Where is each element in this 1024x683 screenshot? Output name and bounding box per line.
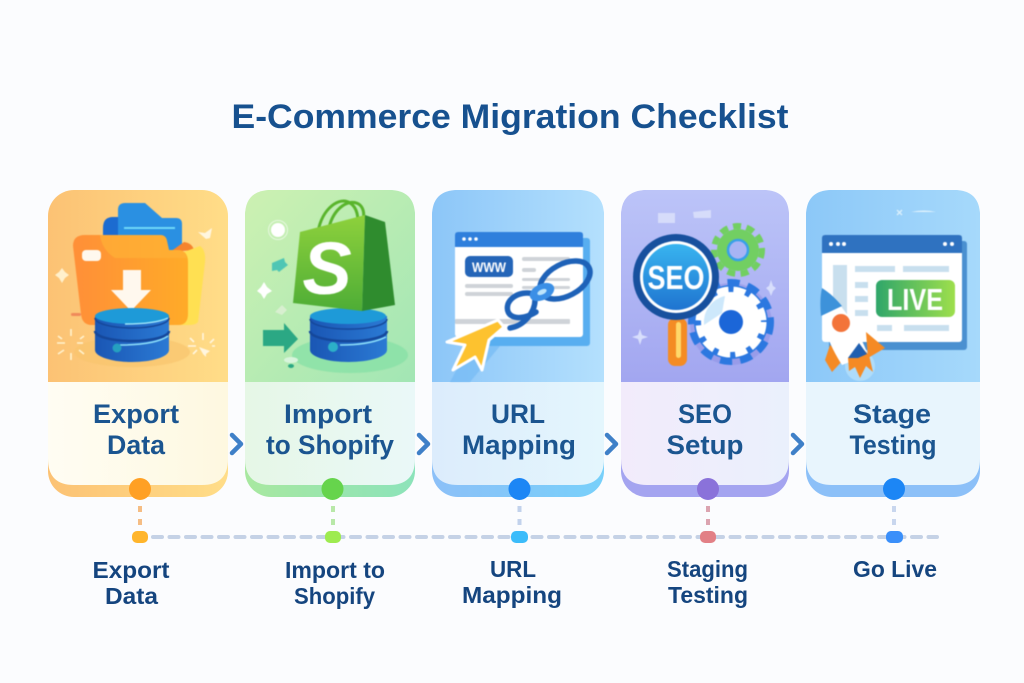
icon: browser with live badge and rocket xyxy=(820,210,967,381)
icon: seo magnifier and gears: SEO xyxy=(648,259,704,296)
label: stage testing xyxy=(850,399,936,460)
card upper fill xyxy=(432,190,604,382)
caption: staging testing xyxy=(667,556,748,608)
label area xyxy=(48,382,228,485)
label: url mapping: Mapping xyxy=(462,430,576,460)
caption: url mapping: Mapping xyxy=(462,582,562,608)
panel: stage testing xyxy=(806,190,980,497)
label: url mapping xyxy=(462,399,576,460)
arrow 1 xyxy=(232,435,241,453)
milestone 4 marker xyxy=(697,478,719,543)
caption: import to shopify: Shopify xyxy=(294,583,375,609)
arrow 3 xyxy=(607,435,616,453)
card upper fill xyxy=(806,190,980,382)
label area xyxy=(245,382,415,485)
caption: export data xyxy=(92,557,170,609)
label: url mapping: URL xyxy=(491,399,545,429)
label: seo setup xyxy=(666,399,744,460)
icon: shopify bag on database: S xyxy=(302,227,352,310)
panel: import to shopify xyxy=(245,190,415,497)
panel: seo setup xyxy=(621,190,789,497)
milestone 5 marker xyxy=(883,478,905,543)
arrow 2 xyxy=(419,435,428,453)
card background xyxy=(621,190,789,497)
label: seo setup: Setup xyxy=(666,430,744,460)
title: E-Commerce Migration Checklist xyxy=(232,98,788,136)
caption: export data: Data xyxy=(105,583,158,609)
label: export data: Export xyxy=(93,399,179,429)
milestone 1 marker xyxy=(129,478,151,543)
icon: browser with live badge and rocket: LIVE xyxy=(887,282,943,317)
caption: import to shopify: Import to xyxy=(285,557,385,583)
caption: url mapping xyxy=(462,556,562,608)
icon: seo magnifier and gears xyxy=(632,210,776,366)
caption: staging testing: Testing xyxy=(668,582,748,608)
label: import to shopify xyxy=(266,399,394,460)
card background xyxy=(432,190,604,497)
card upper fill xyxy=(245,190,415,382)
timeline dashed line xyxy=(153,535,937,539)
caption: export data: Export xyxy=(92,557,170,583)
card background xyxy=(48,190,228,497)
caption: staging testing: Staging xyxy=(667,556,748,582)
icon: shopify bag on database xyxy=(257,201,408,373)
panel: export data xyxy=(48,190,228,497)
milestone 3 marker xyxy=(508,478,530,543)
milestone 2 marker xyxy=(322,478,344,543)
caption: import to shopify xyxy=(285,557,385,609)
label: seo setup: SEO xyxy=(678,399,732,429)
label: import to shopify: Import xyxy=(284,399,372,429)
timeline xyxy=(129,478,937,543)
label area xyxy=(806,382,980,485)
label: stage testing: Stage xyxy=(853,399,931,429)
card background xyxy=(245,190,415,497)
label area xyxy=(432,382,604,485)
label: export data xyxy=(93,399,179,460)
caption: url mapping: URL xyxy=(490,556,536,582)
icon: browser, link and cursor: WWW xyxy=(472,259,507,275)
label area xyxy=(621,382,789,485)
icon: folder with database xyxy=(55,203,215,367)
icon: browser, link and cursor xyxy=(447,232,596,382)
panel: url mapping xyxy=(432,190,604,497)
card background xyxy=(806,190,980,497)
arrow 4 xyxy=(793,435,802,453)
card upper fill xyxy=(621,190,789,382)
label: import to shopify: to Shopify xyxy=(266,430,394,460)
label: export data: Data xyxy=(107,430,166,460)
caption: go live: Go Live xyxy=(853,556,937,582)
label: stage testing: Testing xyxy=(850,430,936,460)
